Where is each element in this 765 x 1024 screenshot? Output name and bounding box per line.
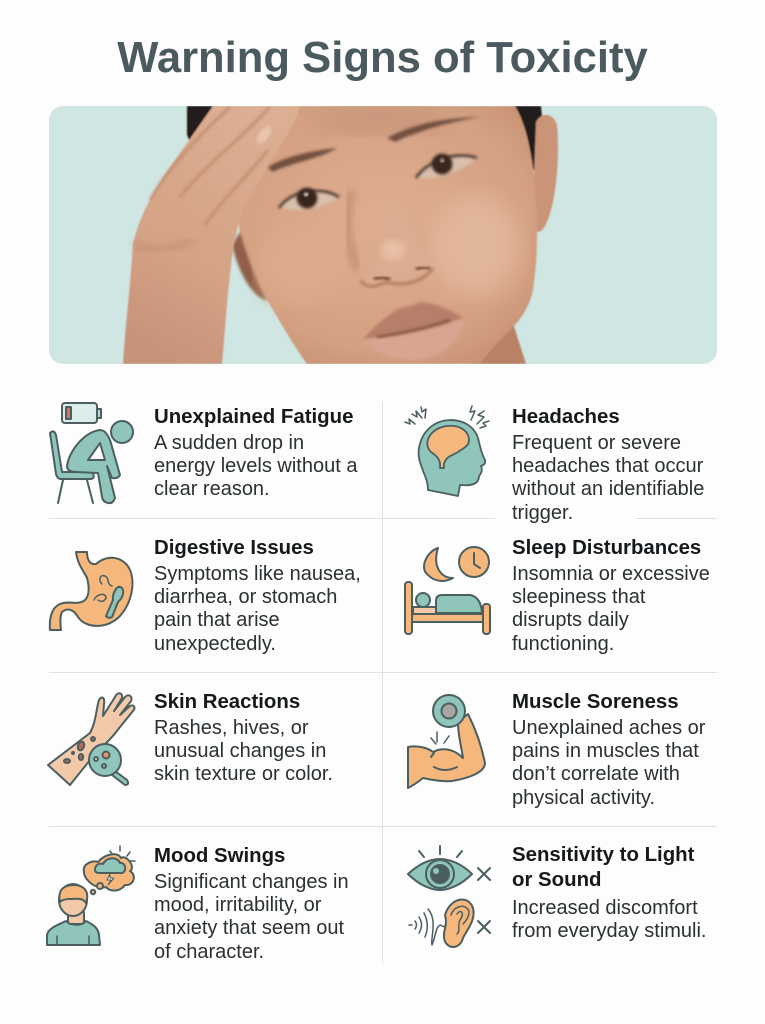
item: Sleep Disturbances: functioning. [512, 633, 614, 655]
item: Skin Reactions: Skin Reactions [154, 691, 300, 713]
item: Unexplained Fatigue: energy levels without a [154, 455, 357, 477]
item: Digestive Issues: diarrhea, or stomach [154, 586, 337, 608]
item: Sleep Disturbances: disrupts daily [512, 609, 629, 631]
item: Skin Reactions: unusual changes in [154, 740, 326, 762]
item: Unexplained Fatigue [154, 406, 358, 500]
item: Sensitivity to Light or Sound: Sensitivity to Light [512, 844, 694, 866]
item: Unexplained Fatigue: clear reason. [154, 478, 270, 500]
icon: eye and ear with crosses [407, 845, 491, 948]
item: Skin Reactions [154, 691, 333, 785]
item: Sleep Disturbances [512, 537, 710, 655]
icon: head with brain and lightning [404, 405, 490, 497]
item: Headaches: trigger. [512, 502, 573, 524]
item: Digestive Issues: Symptoms like nausea, [154, 563, 361, 585]
item: Sensitivity to Light or Sound: or Sound [512, 869, 601, 891]
icon: bed with moon and clock [404, 546, 491, 635]
icon: mood head with storm cloud [46, 845, 136, 946]
item: Skin Reactions: Rashes, hives, or [154, 717, 309, 739]
item: Muscle Soreness: pains in muscles that [512, 740, 699, 762]
item: Mood Swings: Mood Swings [154, 845, 285, 867]
item: Muscle Soreness: don’t correlate with [512, 763, 680, 785]
item: Mood Swings: of character. [154, 941, 264, 963]
item: Unexplained Fatigue: Unexplained Fatigue [154, 406, 353, 428]
item: Mood Swings [154, 845, 349, 963]
item: Digestive Issues: Digestive Issues [154, 537, 314, 559]
item: Digestive Issues [154, 537, 361, 655]
item: Headaches: Headaches [512, 406, 620, 428]
item: Sensitivity to Light or Sound [512, 844, 706, 942]
item: Sleep Disturbances: sleepiness that [512, 586, 645, 608]
item: Digestive Issues: unexpectedly. [154, 633, 276, 655]
item: Headaches: without an identifiable [512, 478, 704, 500]
item: Unexplained Fatigue: A sudden drop in [154, 432, 304, 454]
item: Digestive Issues: pain that arise [154, 609, 280, 631]
item: Mood Swings: Significant changes in [154, 871, 349, 893]
item: Sleep Disturbances: Insomnia or excessive [512, 563, 710, 585]
item: Mood Swings: anxiety that seem out [154, 917, 344, 939]
item: Skin Reactions: skin texture or color. [154, 763, 333, 785]
icon: arm rash with magnifier [47, 692, 136, 786]
item: Headaches [512, 406, 704, 524]
item: Mood Swings: mood, irritability, or [154, 894, 321, 916]
hero photo: woman touching forehead [49, 106, 717, 364]
item: Muscle Soreness: Unexplained aches or [512, 717, 705, 739]
item: Muscle Soreness [512, 691, 706, 809]
item: Muscle Soreness: Muscle Soreness [512, 691, 679, 713]
icon: flexed arm with dumbbell [407, 694, 486, 789]
title: Warning Signs of Toxicity [117, 34, 648, 82]
item: Sensitivity to Light or Sound: from everyday stimuli. [512, 920, 706, 942]
item: Headaches: Frequent or severe [512, 432, 681, 454]
icon: fatigue person with low battery [49, 402, 134, 504]
icon: stomach with spoon [48, 551, 134, 631]
item: Muscle Soreness: physical activity. [512, 787, 655, 809]
item: Sleep Disturbances: Sleep Disturbances [512, 537, 701, 559]
item: Sensitivity to Light or Sound: Increased discomfort [512, 897, 698, 919]
item: Headaches: headaches that occur [512, 455, 703, 477]
